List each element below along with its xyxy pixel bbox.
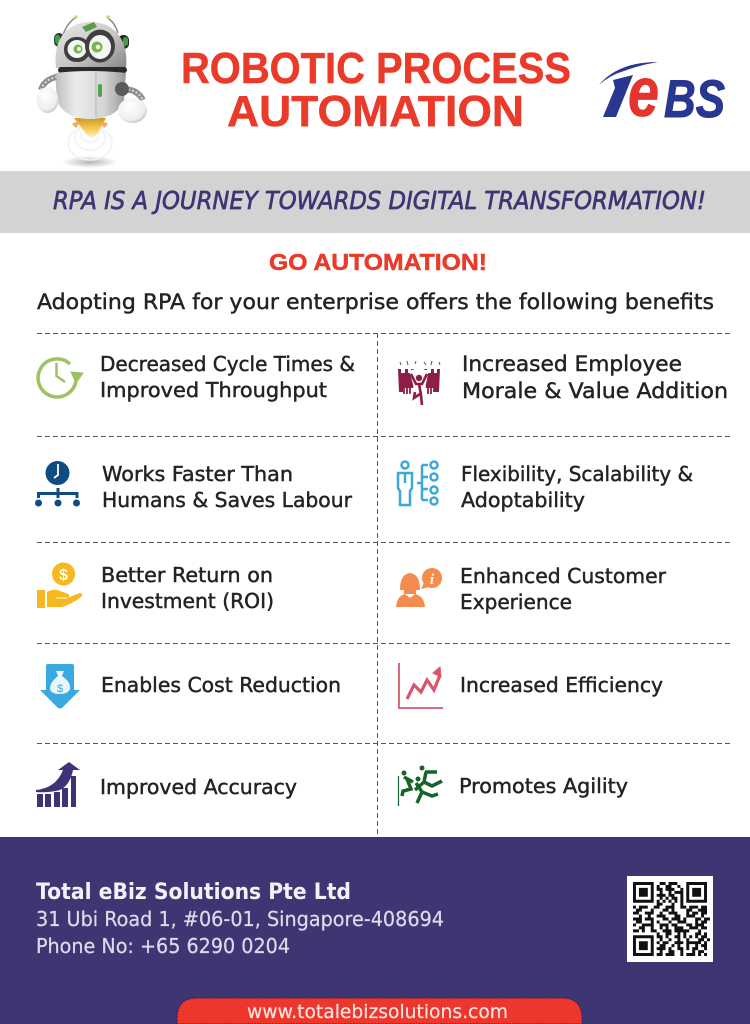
title xyxy=(181,44,571,136)
text: Promotes Agility xyxy=(459,774,628,798)
text: Increased Employee xyxy=(462,352,682,376)
intro sentence: Adopting RPA for your enterprise offers the following benefits xyxy=(37,290,714,315)
benefit: accuracy xyxy=(36,762,297,807)
robot mascot xyxy=(36,15,147,168)
text: Experience xyxy=(460,590,572,614)
benefits grid xyxy=(35,333,733,836)
footer panel xyxy=(0,837,750,1024)
text xyxy=(100,352,355,402)
benefit: works faster xyxy=(35,461,353,512)
icon: running figures xyxy=(398,766,442,806)
icon: hand with coin: $ xyxy=(59,567,68,584)
benefit: cycle times xyxy=(38,352,355,402)
website button xyxy=(177,998,582,1024)
icon: person with branching nodes xyxy=(398,462,438,505)
address: 31 Ubi Road 1, #06-01, Singapore-408694 xyxy=(36,907,444,931)
benefit: ROI xyxy=(37,562,274,613)
text: Morale & Value Addition xyxy=(462,379,728,403)
text xyxy=(101,563,274,613)
icon: cheering crowd xyxy=(398,361,440,405)
benefit: customer experience xyxy=(396,564,667,614)
subheading: GO AUTOMATION! xyxy=(269,249,487,275)
icon: hand with coin xyxy=(37,562,82,608)
text: Improved Accuracy xyxy=(100,775,297,799)
icon: agent with info bubble: i xyxy=(430,572,435,588)
text: Enhanced Customer xyxy=(460,564,667,588)
benefit: agility xyxy=(398,766,628,806)
icon: agent with info bubble xyxy=(396,568,442,607)
company name: Total eBiz Solutions Pte Ltd xyxy=(36,880,351,905)
banner xyxy=(0,171,750,233)
text xyxy=(460,564,667,614)
icon: money bag down arrow xyxy=(40,664,80,708)
text xyxy=(462,352,728,403)
icon: money bag down arrow: $ xyxy=(57,683,63,695)
text: Better Return on xyxy=(101,563,273,587)
text: Works Faster Than xyxy=(102,462,293,486)
text: Adoptability xyxy=(461,488,585,512)
banner: RPA IS A JOURNEY TOWARDS DIGITAL TRANSFORMATION! xyxy=(53,186,706,215)
benefit: efficiency xyxy=(399,663,663,708)
text: Flexibility, Scalability & xyxy=(461,462,693,486)
TeBS logo: BS xyxy=(664,70,725,129)
text xyxy=(461,462,693,512)
text: Investment (ROI) xyxy=(101,589,274,613)
text: Decreased Cycle Times & xyxy=(100,352,355,376)
text: Humans & Saves Labour xyxy=(102,488,353,512)
icon: rising line chart xyxy=(399,663,443,708)
text: Enables Cost Reduction xyxy=(101,673,341,697)
text: Improved Throughput xyxy=(100,378,327,402)
title: AUTOMATION xyxy=(227,87,524,136)
phone: Phone No: +65 6290 0204 xyxy=(36,934,290,958)
title: ROBOTIC PROCESS xyxy=(181,44,571,93)
icon: growth bars and arrow xyxy=(36,762,80,807)
icon: clock hierarchy xyxy=(35,461,80,506)
QR code xyxy=(627,876,713,962)
benefit: flexibility xyxy=(398,462,693,512)
TeBS logo: e xyxy=(628,53,659,131)
benefit: cost reduction xyxy=(40,664,341,708)
text: Increased Efficiency xyxy=(460,673,663,697)
text xyxy=(102,462,353,512)
benefit: employee morale xyxy=(398,352,728,405)
TeBS logo xyxy=(599,53,725,131)
icon: clock xyxy=(38,359,83,397)
header xyxy=(36,15,725,168)
website button: www.totalebizsolutions.com xyxy=(247,1001,508,1023)
